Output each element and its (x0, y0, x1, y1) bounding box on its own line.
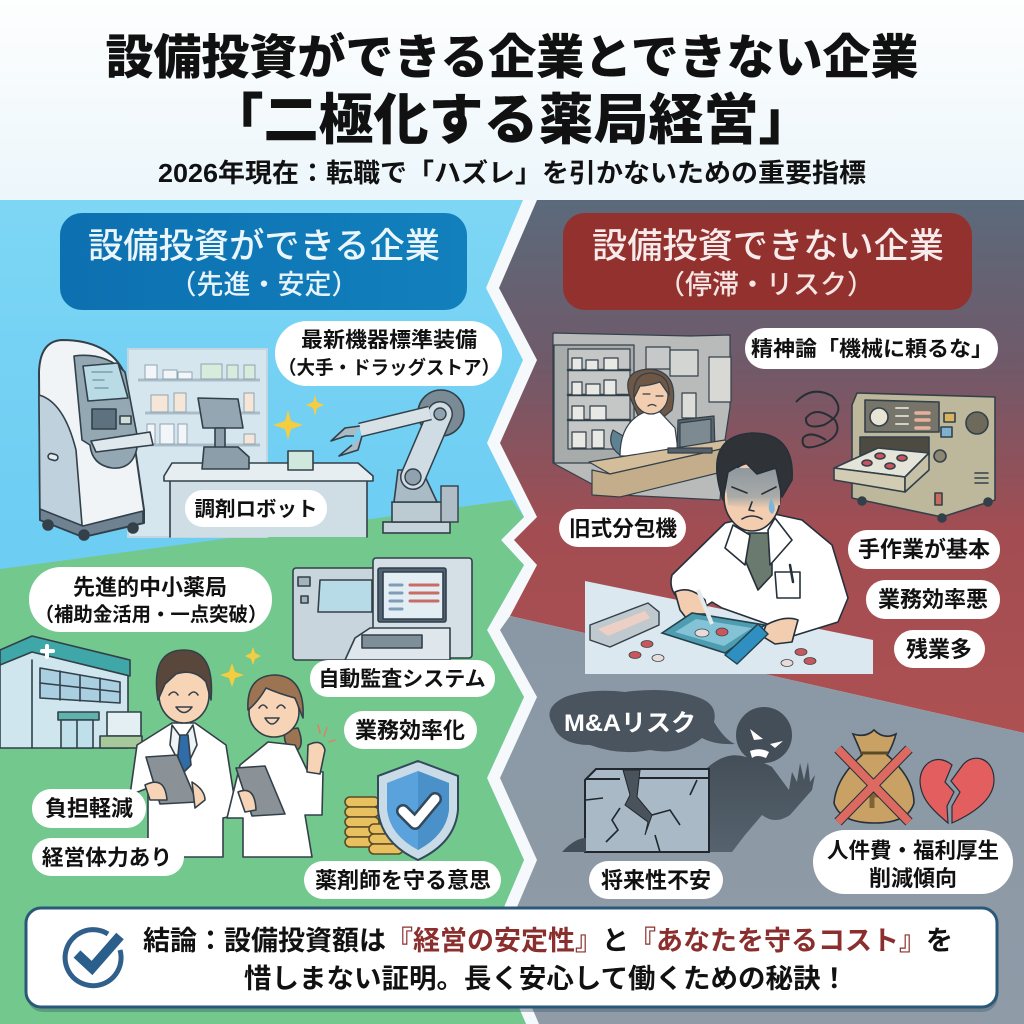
label: much overtime (894, 630, 985, 668)
title: 「二極化する薬局経営」 (208, 89, 814, 151)
label: advanced small pharmacy: 先進的中小薬局 (73, 575, 227, 600)
heading: left panel: （先進・安定） (170, 270, 358, 300)
label: old packaging machine: 旧式分包機 (569, 516, 677, 541)
label: dispensing robot: 調剤ロボット (194, 498, 318, 521)
heading: right panel: 設備投資できない企業 (592, 227, 944, 266)
label: old packaging machine (559, 509, 686, 547)
label: much overtime: 残業多 (906, 637, 972, 662)
icon: small sparkles (220, 647, 261, 687)
label: will to protect pharmacists: 薬剤師を守る意思 (315, 868, 491, 893)
illustration: pill tray and box (590, 590, 816, 666)
title (106, 31, 918, 151)
conclusion text: 惜しまない証明。長く安心して働くための秘訣！ (244, 964, 848, 994)
label: future uncertainty: 将来性不安 (601, 868, 711, 893)
icon: broken heart (920, 758, 994, 823)
illustration: work table (585, 581, 873, 674)
callout: M&A risk (549, 690, 735, 752)
label: efficiency: 業務効率化 (355, 718, 465, 743)
icon: cracked wall block (562, 769, 709, 852)
icon: pharmacy building (0, 636, 142, 748)
conclusion text (143, 926, 953, 994)
illustration: tired male pharmacist (671, 433, 848, 644)
heading: right panel: （停滞・リスク） (658, 270, 874, 300)
conclusion text: 結論：設備投資額は『経営の安定性』と『あなたを守るコスト』を (143, 926, 953, 956)
panel: green lower background (0, 500, 526, 1024)
illustration: smiling male pharmacist (130, 650, 237, 857)
heading: right panel (563, 213, 972, 310)
label: manual work: 手作業が基本 (858, 537, 990, 562)
label: latest equipment: （大手・ドラッグストア） (278, 356, 500, 379)
label: will to protect pharmacists (304, 861, 501, 899)
icon: old packaging machine (834, 393, 995, 522)
callout: M&A risk: M&Aリスク (564, 710, 696, 737)
label: manual work (848, 530, 1000, 569)
label: labor and welfare cuts: 削減傾向 (869, 866, 957, 891)
label: poor efficiency (866, 580, 1000, 619)
icon: robot arm (331, 390, 464, 533)
icon: sparkles (273, 395, 324, 440)
subtitle: 2026年現在：転職で「ハズレ」を引かないための重要指標 (158, 158, 866, 188)
label: spiritualism: 精神論「機械に頼るな」 (751, 338, 993, 361)
label: advanced small pharmacy (29, 567, 272, 632)
panel: conclusion (26, 908, 998, 1012)
label: latest equipment: 最新機器標準装備 (301, 329, 477, 352)
label: audit system: 自動監査システム (318, 668, 486, 691)
illustration: pharmacy shelves (128, 349, 267, 537)
heading: left panel (60, 213, 467, 310)
label: financial strength (32, 838, 184, 876)
label: labor and welfare cuts (813, 830, 1013, 894)
label: future uncertainty (589, 861, 723, 899)
illustration: old back office with tired pharmacist (553, 333, 731, 500)
label: labor and welfare cuts: 人件費・福利厚生 (827, 839, 999, 863)
header background (0, 0, 1024, 201)
heading: left panel: 設備投資ができる企業 (88, 227, 440, 266)
label: reduced burden (32, 789, 146, 828)
label: advanced small pharmacy: （補助金活用・一点突破） (35, 604, 267, 626)
icon: shield with check (378, 761, 458, 860)
icon: audit machine (293, 558, 472, 660)
label: dispensing robot (185, 490, 327, 527)
icon: dizzy scribble (796, 392, 838, 447)
icon: shadow figure (700, 707, 815, 852)
icon: dispensing kiosk (39, 340, 153, 540)
label: poor efficiency: 業務効率悪 (878, 587, 988, 612)
panel: gray lower right background (500, 616, 1024, 1024)
icon: coins (345, 797, 403, 854)
title: 設備投資ができる企業とできない企業 (106, 31, 918, 85)
label: financial strength: 経営体力あり (42, 845, 172, 870)
label: reduced burden: 負担軽減 (45, 796, 133, 821)
label: audit system (310, 660, 495, 697)
label: spiritualism (745, 328, 998, 369)
icon: counter with register (164, 398, 373, 537)
label: latest equipment (275, 321, 502, 386)
icon: money bag crossed out (834, 730, 914, 823)
panel: blue advanced background (0, 200, 526, 1024)
label: efficiency (344, 711, 477, 749)
icon: check circle (65, 930, 121, 986)
illustration: smiling female pharmacist (227, 675, 335, 857)
panel: dark red risk background (499, 200, 1024, 733)
